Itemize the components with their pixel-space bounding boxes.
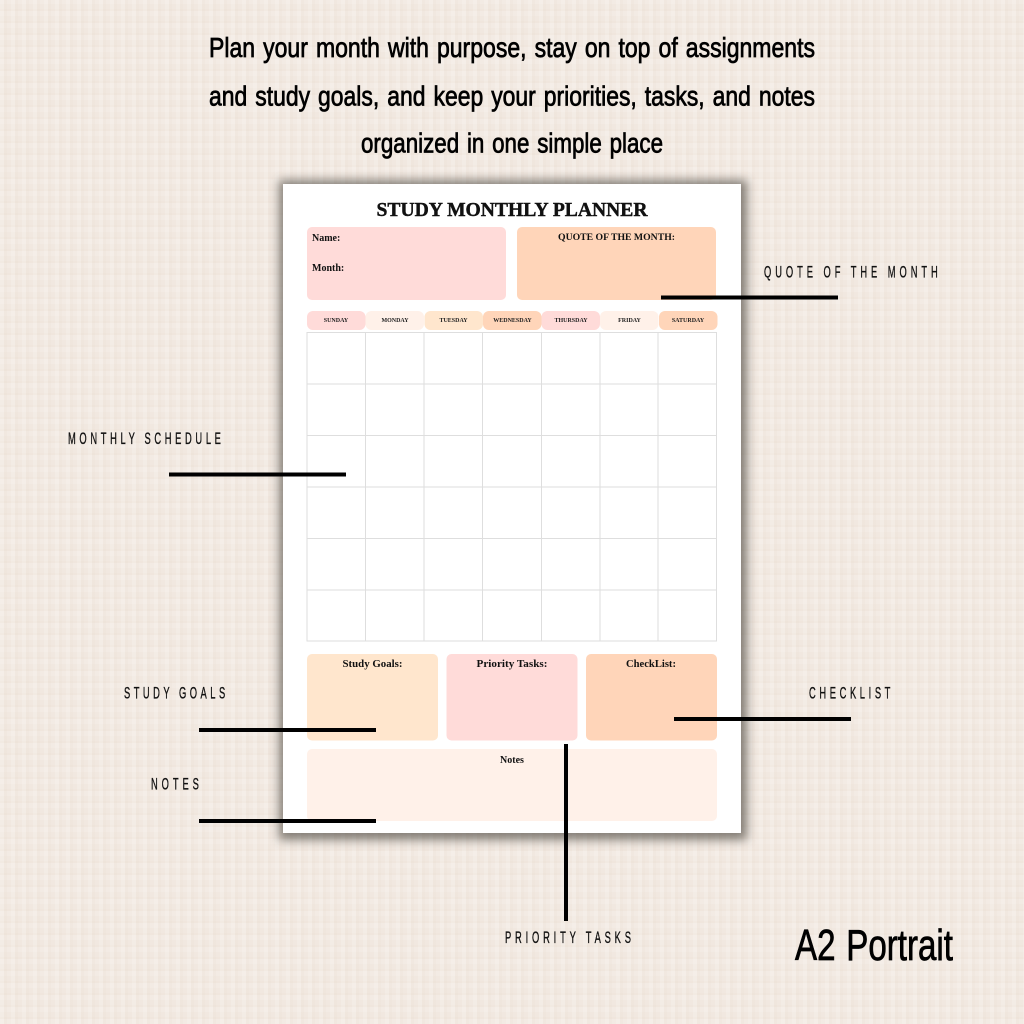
- monthly calendar grid: [307, 332, 716, 641]
- panel: priority tasks: [446, 654, 578, 740]
- weekday header row: SATURDAY: [672, 318, 705, 324]
- planner page: [279, 180, 747, 840]
- weekday header row: MONDAY: [381, 318, 409, 324]
- planner title: STUDY MONTHLY PLANNER: [376, 199, 648, 221]
- weekday header row: [307, 311, 718, 330]
- weekday header row: FRIDAY: [618, 318, 642, 324]
- panel: checklist: CheckList:: [626, 659, 676, 670]
- callout: checklist: [674, 684, 891, 721]
- panel: quote of the month: [517, 227, 716, 300]
- callout: checklist: CHECKLIST: [809, 684, 891, 702]
- size label: A2 Portrait: [795, 921, 953, 970]
- weekday header row: SUNDAY: [324, 318, 349, 324]
- callout: study goals: STUDY GOALS: [124, 684, 225, 702]
- panel: notes: [307, 749, 717, 821]
- callout: monthly schedule: MONTHLY SCHEDULE: [68, 429, 221, 448]
- callout: notes: NOTES: [151, 775, 199, 793]
- callout: priority tasks: [505, 744, 631, 947]
- panel: name and month: [307, 227, 506, 300]
- panel: name and month: Name:: [312, 233, 340, 244]
- callout: notes: [151, 775, 376, 823]
- weekday header row: WEDNESDAY: [493, 318, 532, 324]
- panel: study goals: Study Goals:: [342, 659, 402, 670]
- callout: monthly schedule: [68, 429, 346, 476]
- callout: priority tasks: PRIORITY TASKS: [505, 928, 631, 947]
- panel: notes: Notes: [500, 755, 524, 766]
- callout: quote of the month: [661, 263, 938, 300]
- panel: priority tasks: Priority Tasks:: [476, 659, 548, 670]
- headline text: Plan your month with purpose, stay on top of assignments: [209, 32, 815, 63]
- callout: quote of the month: QUOTE OF THE MONTH: [764, 263, 938, 281]
- headline text: [209, 32, 815, 158]
- panel: checklist: [586, 654, 717, 740]
- panel: study goals: [307, 654, 438, 740]
- callout: study goals: [124, 684, 376, 732]
- panel: quote of the month: QUOTE OF THE MONTH:: [558, 233, 675, 243]
- headline text: and study goals, and keep your priorities, tasks, and notes: [209, 80, 815, 112]
- headline text: organized in one simple place: [361, 128, 663, 158]
- weekday header row: THURSDAY: [554, 318, 588, 324]
- panel: name and month: Month:: [312, 263, 344, 274]
- weekday header row: TUESDAY: [439, 318, 468, 324]
